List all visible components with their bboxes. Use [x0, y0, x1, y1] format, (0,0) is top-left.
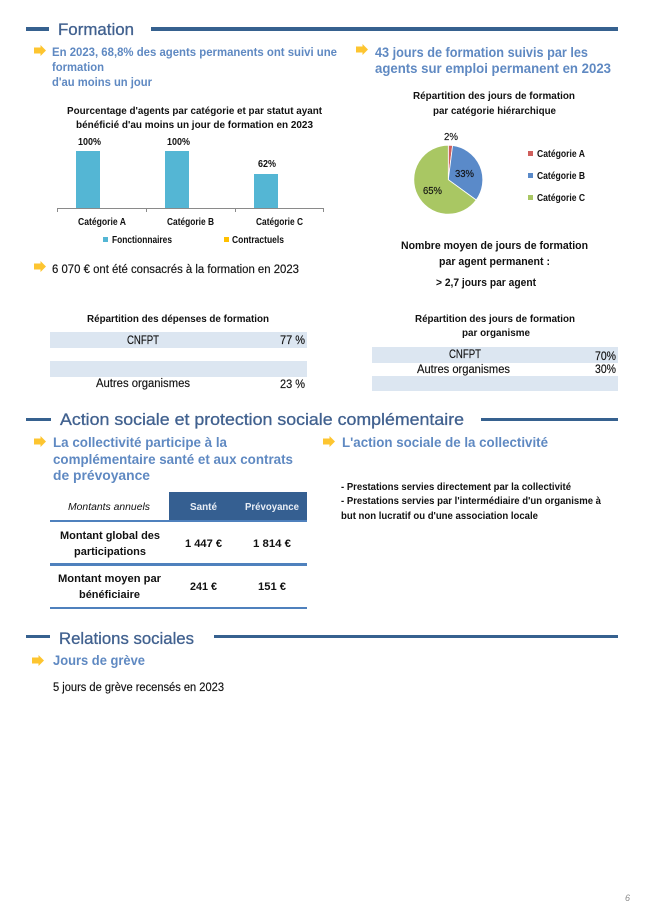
key figure: training spend: 6 070 € ont été consacrés à la formation en 2023: [52, 264, 299, 276]
page number: 6: [625, 893, 630, 903]
bar chart: agents trained by category: Pourcentage d'agents par catégorie et par statut ayant: [67, 106, 323, 117]
table: training spend breakdown: 77 %: [280, 335, 305, 347]
table: annual amounts: Montants annuels: [68, 502, 150, 513]
pie chart: training days by category: Catégorie B: [537, 171, 585, 182]
table: training days by organisation: CNFPT: [449, 349, 481, 361]
table: annual amounts: 1 814 €: [253, 538, 291, 550]
bar chart: agents trained by category: Fonctionnaires: [112, 235, 172, 246]
bar chart: agents trained by category: 62%: [258, 159, 276, 170]
table: annual amounts: 241 €: [190, 581, 217, 593]
table: annual amounts: Montant moyen par: [58, 573, 162, 585]
table: annual amounts: bénéficiaire: [79, 589, 140, 601]
pie chart: training days by category: 65%: [423, 185, 442, 197]
heading: Formation: Formation: [58, 20, 134, 39]
table: annual amounts: [50, 492, 307, 609]
table: training days by organisation: Répartition des jours de formation: [415, 314, 575, 325]
callout: average training days: Nombre moyen de jours de formation: [401, 240, 588, 252]
pie chart: training days by category: Catégorie C: [537, 193, 585, 204]
table: training spend breakdown: Répartition des dépenses de formation: [87, 314, 269, 325]
pie chart: training days by category: Répartition des jours de formation: [413, 91, 575, 102]
pie chart: training days by category: [413, 91, 585, 214]
key figure: agents trained: formation: [52, 62, 104, 74]
table: annual amounts: participations: [74, 546, 146, 558]
key figure: agents trained: d'au moins un jour: [52, 77, 153, 89]
key figure: agents trained: En 2023, 68,8% des agents permanents ont suivi une: [52, 47, 337, 59]
heading: Relations sociales: Relations sociales: [59, 629, 194, 648]
bar chart: agents trained by category: Catégorie C: [256, 217, 303, 228]
heading: Action sociale: Action sociale et protection sociale complémentaire: [60, 410, 464, 429]
key figure: agents trained: [34, 45, 337, 89]
pie chart: training days by category: par catégorie hiérarchique: [433, 106, 556, 117]
key message: social action: L'action sociale de la collectivité: [342, 435, 548, 450]
table: training days by organisation: 30%: [595, 364, 616, 376]
bar chart: agents trained by category: bénéficié d'au moins un jour de formation en 2023: [76, 120, 313, 131]
table: training days by organisation: [372, 314, 618, 391]
text block: services list: - Prestations servies par l'intermédiaire d'un organisme à: [341, 496, 601, 507]
table: training days by organisation: par organisme: [462, 328, 530, 339]
key figure: training days: 43 jours de formation suivis par les: [375, 45, 588, 60]
key figure: training days: agents sur emploi permanent en 2023: [375, 61, 611, 76]
key message: health and provident contributions: de prévoyance: [53, 468, 151, 483]
table: training days by organisation: 70%: [595, 351, 616, 363]
bar chart: agents trained by category: Contractuels: [232, 235, 284, 246]
bar chart: agents trained by category: [58, 106, 324, 246]
text block: services list: [341, 482, 601, 522]
key message: health and provident contributions: La collectivité participe à la: [53, 435, 227, 450]
table: annual amounts: 151 €: [258, 581, 286, 593]
pie chart: training days by category: 2%: [444, 131, 458, 143]
table: training spend breakdown: Autres organismes: [96, 378, 190, 390]
key message: health and provident contributions: complémentaire santé et aux contrats: [53, 452, 293, 467]
bar chart: agents trained by category: 100%: [78, 137, 101, 148]
bar chart: agents trained by category: Catégorie A: [78, 217, 126, 228]
callout: average training days: [401, 240, 588, 289]
table: training days by organisation: Autres organismes: [417, 364, 510, 376]
key figure: training days: [356, 44, 611, 76]
table: training spend breakdown: 23 %: [280, 379, 305, 391]
pie chart: training days by category: 33%: [455, 168, 474, 180]
table: annual amounts: 1 447 €: [185, 538, 222, 550]
bar chart: agents trained by category: 100%: [167, 137, 190, 148]
text block: services list: but non lucratif ou d'une association locale: [341, 511, 538, 522]
table: annual amounts: Santé: [190, 501, 217, 513]
heading: Relations sociales: [26, 629, 618, 648]
pie chart: training days by category: Catégorie A: [537, 149, 585, 160]
table: training spend breakdown: CNFPT: [127, 335, 159, 347]
table: annual amounts: Montant global des: [60, 530, 160, 542]
text block: strike days count: 5 jours de grève recensés en 2023: [53, 682, 224, 694]
text block: services list: - Prestations servies directement par la collectivité: [341, 482, 571, 493]
table: training spend breakdown: [50, 314, 307, 391]
heading: Action sociale: [26, 410, 618, 429]
table: annual amounts: Prévoyance: [245, 501, 299, 513]
callout: average training days: > 2,7 jours par agent: [436, 277, 536, 289]
callout: average training days: par agent permanent :: [439, 256, 550, 268]
key message: health and provident contributions: [34, 435, 293, 483]
key message: strike days: Jours de grève: [53, 653, 145, 668]
bar chart: agents trained by category: Catégorie B: [167, 217, 214, 228]
heading: Formation: [26, 20, 618, 39]
